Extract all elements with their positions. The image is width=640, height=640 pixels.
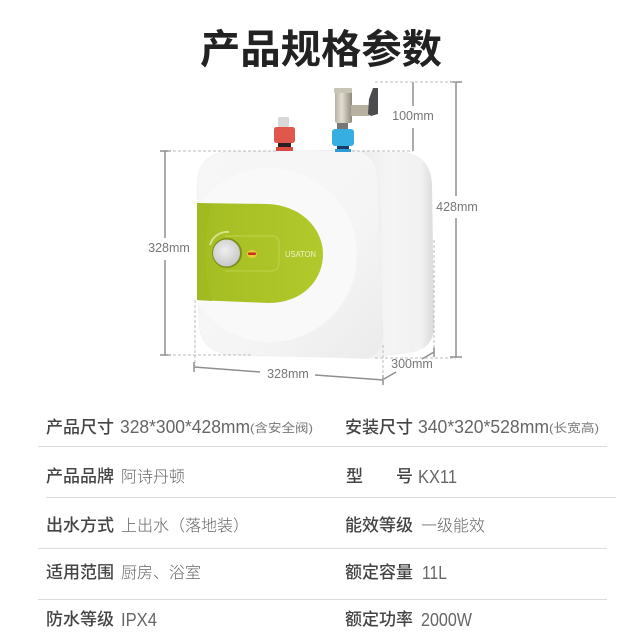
dashed guide lines (168, 82, 456, 380)
red hot water connector (274, 117, 295, 151)
brand label: USATON (285, 249, 316, 259)
row 2: 阿诗丹顿 (121, 468, 185, 486)
row 1: (长宽高) (549, 420, 599, 435)
428mm line (450, 82, 462, 357)
indicator light (247, 250, 257, 258)
row 1: 340*320*528mm (418, 417, 549, 437)
tank side panel (345, 151, 434, 359)
row 4: 厨房、浴室 (121, 564, 201, 582)
control recess (225, 236, 279, 271)
row 5: 额定功率 (345, 609, 413, 629)
row 1 (46, 417, 599, 437)
row 3: 能效等级 (345, 516, 413, 535)
row 4 (46, 562, 447, 583)
300mm line (384, 347, 434, 379)
row 3: 上出水（落地装） (121, 517, 249, 535)
dimension labels: 428mm (436, 200, 478, 214)
front circle relief (183, 168, 357, 342)
row 2: KX11 (418, 467, 457, 487)
dimension labels: 100mm (392, 109, 434, 123)
row 2: 号 (396, 467, 413, 486)
row 4: 适用范围 (46, 563, 114, 582)
row 5 (46, 609, 472, 630)
row 5: IPX4 (121, 610, 157, 630)
row 2 (46, 467, 457, 487)
temperature knob (210, 232, 242, 268)
dimension labels: 300mm (391, 357, 433, 371)
row 3 (46, 515, 485, 535)
row 1: 产品尺寸 (46, 418, 114, 437)
green control panel (197, 203, 323, 303)
row 3: 出水方式 (46, 515, 114, 535)
row 3: 一级能效 (421, 517, 485, 535)
blue cold water connector and safety valve (332, 88, 378, 152)
row 1: (含安全阀) (250, 420, 313, 435)
row 2: 产品品牌 (46, 467, 114, 486)
dimension labels: 328mm (148, 241, 190, 255)
row 4: 11L (422, 563, 447, 583)
dimension labels: 328mm (267, 367, 309, 381)
water heater product illustration (183, 88, 434, 359)
100mm line (412, 82, 414, 151)
row 1: 328*300*428mm (120, 417, 250, 437)
row 5: 防水等级 (46, 610, 114, 629)
row 2: 型 (346, 467, 363, 486)
row 5: 2000W (421, 610, 472, 630)
spec table (38, 417, 616, 630)
tank front (197, 150, 383, 358)
328mm width line (194, 362, 383, 385)
row 1: 安装尺寸 (345, 418, 413, 437)
title: 产品规格参数 (200, 28, 442, 72)
row 4: 额定容量 (345, 562, 413, 582)
dimension labels (148, 109, 478, 381)
328mm height line (160, 151, 171, 355)
dimension lines (160, 82, 462, 385)
